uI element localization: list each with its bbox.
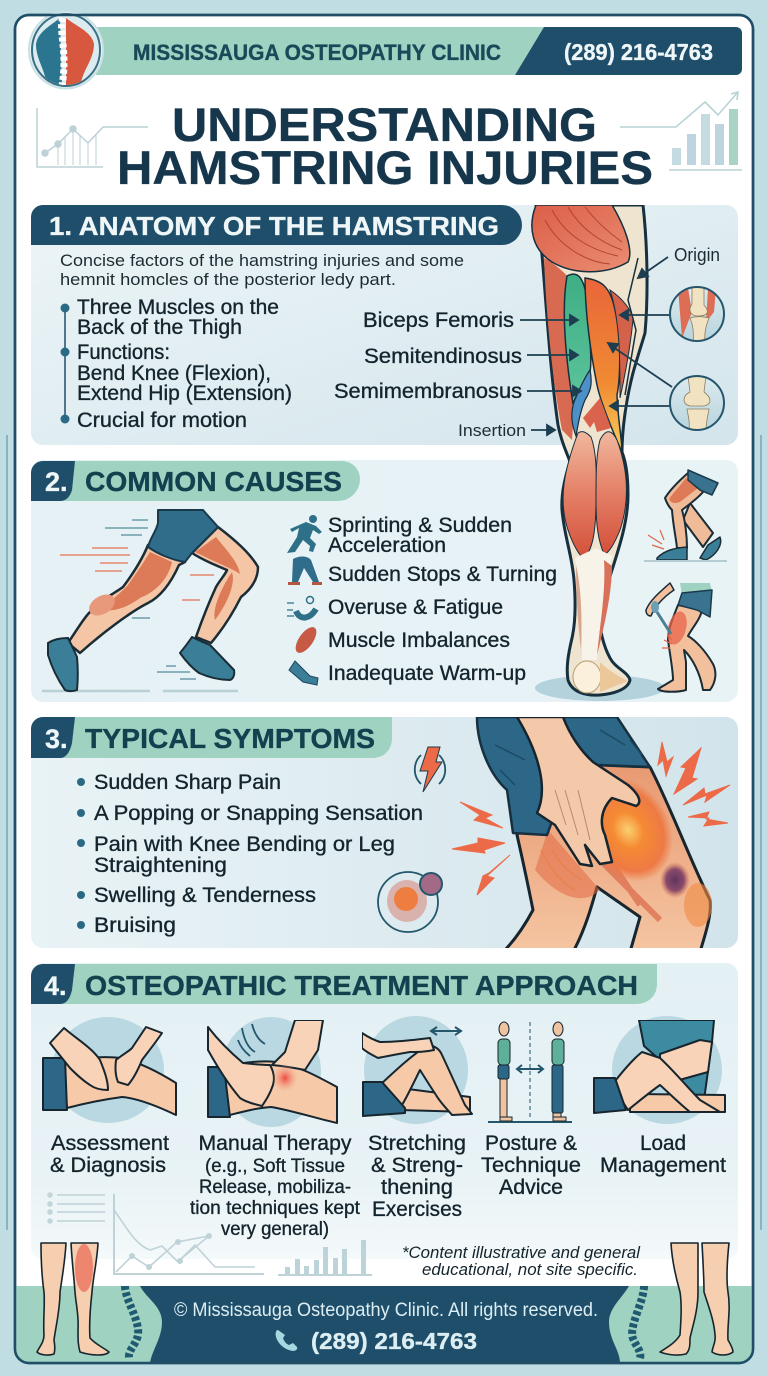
origin label: Origin [674,245,720,265]
title: HAMSTRING INJURIES [117,141,653,194]
clinic name ribbon: MISSISSAUGA OSTEOPATHY CLINIC [133,40,501,65]
heel [573,661,601,693]
caption: stretching: & Streng- [371,1154,463,1177]
clinic name ribbon [96,27,544,75]
hot spot [603,780,672,880]
phone ribbon [515,27,742,75]
cause labels: Acceleration [328,534,446,557]
inset: knee origin [670,285,724,345]
treatment 4: posture [488,1022,572,1122]
treatment 5: load management [594,1016,725,1124]
header left chart decoration [37,108,148,167]
caption: manual therapy: Release, mobiliza- [199,1177,351,1198]
caption: stretching: Exercises [372,1198,462,1221]
bruise [660,862,690,898]
side figure: knee pain with tool [646,583,715,692]
treatment 3: stretching [362,1016,472,1124]
ground shadows [42,690,238,692]
footer text [174,1300,598,1354]
left calf [563,432,596,558]
runner illustration [42,510,258,691]
cause labels: Muscle Imbalances [328,629,510,652]
caption: manual therapy: Manual Therapy [198,1132,352,1155]
side figure: bent knee with foot pain [644,470,727,561]
caption: load management [600,1132,726,1177]
section 1 bullet list: Three Muscles on the [77,296,279,319]
caption: stretching [368,1132,466,1221]
symptoms list: Sudden Sharp Pain [94,771,281,794]
caption: assessment: & Diagnosis [50,1154,166,1177]
labelled arrows on leg [520,257,672,435]
title: UNDERSTANDING [172,98,597,151]
caption: manual therapy [190,1132,361,1240]
achilles tendon [575,548,612,660]
leg [503,765,710,952]
footer spine right [632,1286,644,1358]
section 1 heading: 1. ANATOMY OF THE HAMSTRING [49,211,499,241]
caption: posture: Technique [481,1154,581,1177]
caption: load management: Management [600,1154,726,1177]
icon: sprinting [287,515,322,553]
section 3 heading [31,717,392,758]
section 2 heading [31,461,360,501]
front leg [192,527,258,643]
disclaimer: *Content illustrative and general [402,1243,641,1262]
section 1 bullet list: Crucial for motion [77,409,247,432]
footer right legs [660,1243,733,1355]
cause labels: Sudden Stops & Turning [328,563,557,586]
icon: pain bolt [415,747,445,792]
icon: shoe [289,661,318,685]
hand [517,717,639,866]
muscle labels: Semimembranosus [334,380,522,403]
symptoms list: Swelling & Tenderness [94,884,316,907]
speed lines [60,520,214,679]
footer text: (289) 216-4763 [311,1328,477,1354]
front shoe [180,637,234,680]
section 3 heading: 3. [45,724,68,754]
muscle labels [334,309,522,403]
back leg [68,545,185,653]
icon: swelling and bruise [378,872,442,932]
symptoms list: Bruising [94,914,176,937]
symptoms list: Pain with Knee Bending or Leg [94,833,395,856]
section 2 heading: COMMON CAUSES [85,466,342,497]
insertion label: Insertion [458,421,526,440]
treatment captions [50,1132,726,1240]
section 3 heading: TYPICAL SYMPTOMS [85,723,375,754]
gluteus [532,205,630,272]
section 1 heading [31,205,522,245]
caption: manual therapy: very general) [221,1219,329,1240]
muscle labels: Semitendinosus [364,345,522,368]
disclaimer [402,1243,641,1279]
popliteal red [583,398,611,432]
icon: phone [276,1330,297,1351]
logo: back and spine [29,12,103,88]
cause labels [328,514,557,685]
leg silhouette [536,205,647,695]
causes list [287,514,557,685]
right tendon line [625,258,638,395]
symptoms list: Straightening [94,854,227,877]
inset: knee insertion [670,376,724,432]
thigh pain illustration [477,717,712,952]
caption: posture [481,1132,581,1199]
caption: load management: Load [640,1132,686,1155]
caption: assessment: Assessment [51,1132,169,1155]
caption: assessment [50,1132,169,1177]
symptoms list: A Popping or Snapping Sensation [94,802,423,825]
main leg anatomy illustration [532,205,647,695]
floor shadow under the leg [535,675,665,701]
treatment 1: assessment [43,1017,176,1123]
lateral red strip [610,290,633,398]
section 4 heading: OSTEOPATHIC TREATMENT APPROACH [85,970,638,1001]
section 1 intro text: hemnit homcles of the posterior ledy part. [60,270,396,289]
pain bolts [452,742,730,895]
footer band [15,1286,753,1364]
biceps femoris orange [585,278,622,452]
right calf [596,432,626,554]
section 1 bullet list: Functions: [77,341,170,364]
header right bar chart decoration [620,92,742,170]
phone ribbon: (289) 216-4763 [564,39,713,65]
caption: stretching: thening [381,1176,453,1199]
panel 1 background [31,205,738,445]
footer text: © Mississauga Osteopathy Clinic. All rights reserved. [174,1300,598,1321]
semitendinosus green [564,274,591,404]
section 1 bullet list: Back of the Thigh [77,316,242,339]
shorts [148,510,218,562]
section 1 intro text: Concise factors of the hamstring injuries and some [60,251,464,270]
header banner [29,12,742,88]
footer spine left [125,1286,138,1358]
section 1 bullet list [60,296,292,432]
panel 2 background [31,460,738,702]
caption: stretching: Stretching [368,1132,466,1155]
caption: posture: Posture & [485,1132,577,1155]
section 4 heading: 4. [44,971,67,1001]
panel 4 background [31,963,738,1259]
outer lateral muscle [544,258,574,440]
footer left legs [37,1243,109,1355]
decorative list and charts [47,1192,372,1275]
panel 3 background [31,717,738,948]
icon: muscle [292,624,320,656]
caption: manual therapy: tion techniques kept [190,1198,361,1219]
section 1 bullet list: Extend Hip (Extension) [77,382,292,405]
back shoe [48,638,78,691]
section 1 bullet list: Bend Knee (Flexion), [77,362,271,385]
title [117,98,653,194]
section 1 intro text [60,251,464,289]
shorts [477,717,650,835]
disclaimer: educational, not site specific. [422,1260,638,1279]
cause labels: Sprinting & Sudden [328,514,512,537]
semimembranosus blue [572,370,591,436]
icon: sudden stop [288,556,322,585]
treatment 2: manual therapy [208,1017,337,1127]
muscle labels: Biceps Femoris [363,309,514,332]
icon: fatigue [287,596,316,618]
caption: manual therapy: (e.g., Soft Tissue [205,1156,345,1177]
cause labels: Inadequate Warm-up [328,662,526,685]
cause labels: Overuse & Fatigue [328,596,503,619]
section 4 heading [31,964,657,1004]
section 2 heading: 2. [45,467,68,497]
caption: posture: Advice [499,1176,563,1199]
symptoms list [77,771,423,937]
